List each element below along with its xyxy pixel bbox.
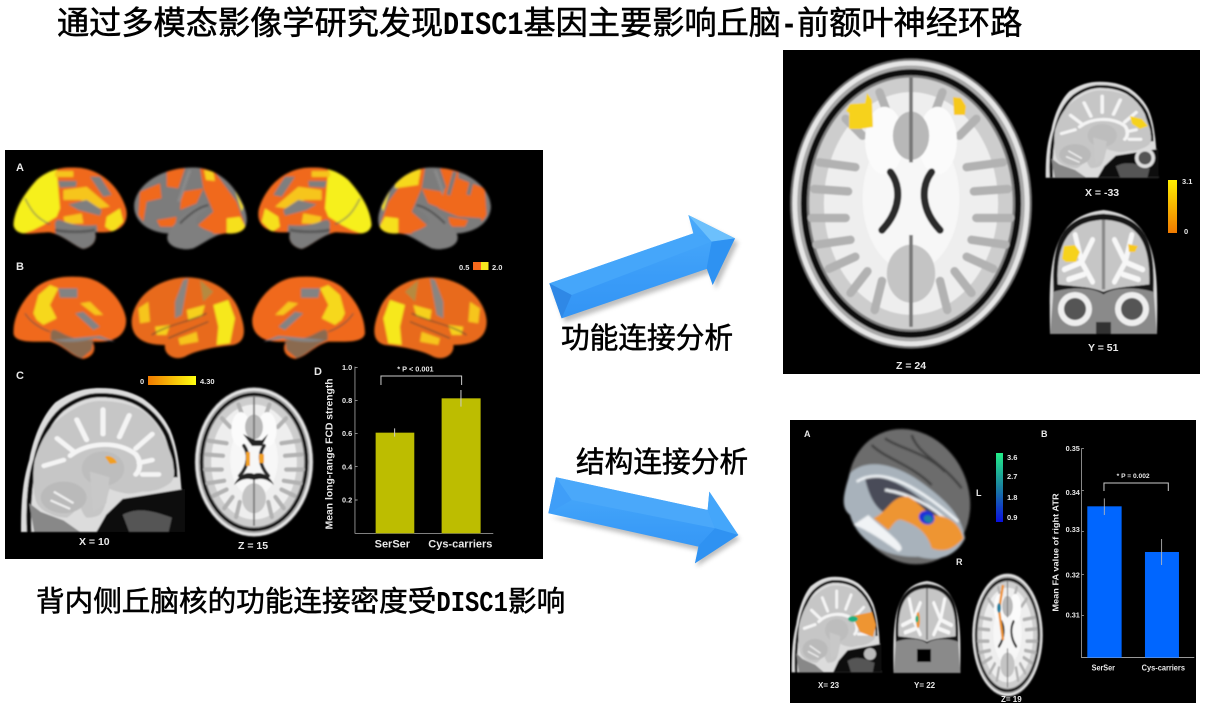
colour scale 0 to 3.1 <box>1168 177 1192 236</box>
panel: functional connectivity slices <box>783 50 1200 374</box>
panel: structural connectivity <box>790 409 1196 704</box>
title: - <box>781 7 797 44</box>
bar chart D: Mean long-range FCD strength <box>325 378 336 529</box>
surface brains rows A and B <box>10 163 493 359</box>
bar chart B: * P = 0.002 <box>1117 473 1150 480</box>
tract colour scale: 3.6 <box>1007 453 1017 462</box>
thalamus colour scale: 0 <box>140 377 144 386</box>
tract colour scale: 0.9 <box>1007 513 1017 522</box>
bar chart D: 0.2 <box>342 496 352 505</box>
caption: thalamus FCD affected by DISC1: DISC1 <box>436 587 508 620</box>
bar chart B: SerSer <box>1092 664 1115 673</box>
tract colour scale: 1.8 <box>1007 493 1017 502</box>
panel letter B: B <box>1041 429 1048 439</box>
axial slice Z = 15 <box>194 387 314 537</box>
orientation labels: R <box>956 557 963 567</box>
orientation labels: L <box>976 488 982 498</box>
panel letter A: A <box>804 429 811 439</box>
colour scale 0 to 3.1: 3.1 <box>1182 177 1192 186</box>
colour scale 0 to 3.1: 0 <box>1184 227 1188 236</box>
panel letter A: A <box>16 162 24 174</box>
title: DISC1 <box>443 7 523 44</box>
bar chart D: 0.8 <box>342 396 352 405</box>
bar chart D: Cys-carriers <box>428 539 492 551</box>
title <box>57 5 1022 44</box>
label Z = 19: Z= 19 <box>1001 695 1022 704</box>
caption: thalamus FCD affected by DISC1: 背内侧丘脑核的功能连接密度受 <box>36 586 436 618</box>
title: 通过多模态影像学研究发现 <box>57 5 443 41</box>
bar chart D: SerSer <box>375 539 411 551</box>
arrow: structural connectivity <box>548 477 740 567</box>
label: structural connectivity analysis: 结构连接分析 <box>576 447 748 479</box>
coronal slice Y = 51 <box>1050 210 1157 334</box>
bar chart B: 0.31 <box>1066 610 1080 619</box>
axial slice Z = 19 <box>972 573 1043 697</box>
caption: thalamus FCD affected by DISC1: 影响 <box>508 586 565 618</box>
bar chart B <box>1051 444 1194 673</box>
bar chart D: 0.6 <box>342 429 352 438</box>
bar chart B: Mean FA value of right ATR <box>1051 493 1061 612</box>
surface colour scale: 2.0 <box>492 263 502 272</box>
bar chart D: 0.4 <box>342 462 353 471</box>
bar chart D: * P < 0.001 <box>397 364 434 373</box>
thalamus colour scale: 4.30 <box>200 377 215 386</box>
sagittal slice X = 23 <box>792 577 882 672</box>
bar chart B: Cys-carriers <box>1142 664 1185 673</box>
label Y = 22: Y= 22 <box>914 681 936 690</box>
3D brain with tract <box>826 409 992 585</box>
label Y = 51: Y = 51 <box>1088 342 1119 354</box>
coronal slice Y = 22 <box>893 581 961 673</box>
panel letter C: C <box>16 370 24 382</box>
label X = 23: X= 23 <box>818 681 840 690</box>
label X = 10: X = 10 <box>79 536 110 548</box>
surface colour scale: 0.5 <box>459 263 469 272</box>
label: functional connectivity analysis: 功能连接分析 <box>561 323 733 355</box>
arrow: functional connectivity <box>549 215 738 322</box>
panel letter B: B <box>16 261 24 273</box>
large axial slice Z = 24 <box>790 58 1032 349</box>
bar chart B: 0.32 <box>1066 570 1080 579</box>
tract colour scale: 2.7 <box>1007 472 1017 481</box>
sagittal slice X = -33 <box>1046 82 1159 178</box>
label X = -33: X = -33 <box>1085 187 1119 199</box>
panel letter D: D <box>314 366 322 378</box>
panel: thalamic functional connectivity density <box>5 150 543 559</box>
title: 基因主要影响丘脑 <box>524 5 781 41</box>
label Z = 15: Z = 15 <box>238 540 268 552</box>
bar chart D: 1.0 <box>342 363 352 372</box>
title: 前额叶神经环路 <box>797 5 1022 41</box>
orientation labels <box>956 488 982 567</box>
label Z = 24: Z = 24 <box>896 360 926 372</box>
sagittal slice X = 10 <box>21 388 185 532</box>
tract colour scale <box>996 453 1017 522</box>
bar chart D <box>325 363 493 551</box>
surface colour scale <box>459 262 502 272</box>
bar chart B: 0.35 <box>1066 444 1080 453</box>
bar chart B: 0.33 <box>1066 525 1080 534</box>
thalamus colour scale <box>140 376 215 386</box>
bar chart B: 0.34 <box>1066 488 1081 497</box>
